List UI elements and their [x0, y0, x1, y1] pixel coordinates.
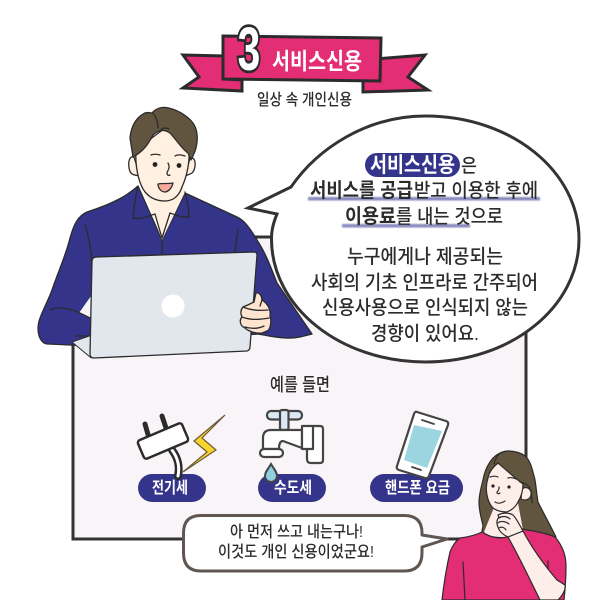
man shirt folds [50, 225, 238, 336]
line 3 regular: 를 내는 것으로 [396, 206, 503, 228]
laptop base [72, 335, 92, 358]
man fingers [242, 300, 269, 328]
man right ear [185, 158, 195, 176]
ribbon right tail [363, 55, 428, 92]
woman hair [479, 451, 556, 540]
example: water [258, 410, 326, 502]
bubble text [308, 153, 540, 345]
man hand [240, 293, 271, 333]
example: electricity [137, 415, 225, 502]
icon: water drop [265, 464, 277, 482]
line 1 tail: 은 [461, 156, 477, 177]
title ribbon [183, 16, 428, 92]
man eyes [153, 162, 181, 168]
woman fingers [498, 516, 510, 530]
reply bubble shape [184, 516, 447, 571]
ribbon title: 서비스신용 [272, 48, 362, 74]
panel: examples background [73, 237, 526, 539]
woman eyes [491, 484, 511, 489]
ribbon left tail [183, 55, 242, 91]
highlight underline 2 [342, 224, 470, 228]
man brows [151, 154, 185, 156]
woman hand [497, 513, 523, 537]
subtitle: 일상 속 개인신용 [257, 91, 352, 109]
man hair strand [153, 113, 169, 132]
icon: phone [397, 412, 448, 478]
icon: plug [137, 416, 189, 476]
main speech bubble [248, 116, 579, 362]
icon: faucet [260, 410, 323, 463]
gap between arm and laptop [79, 296, 91, 319]
line 2 bold: 서비스를 공급 [310, 179, 413, 202]
line 4: 누구에게나 제공되는 [347, 246, 503, 268]
laptop screen [90, 252, 257, 358]
woman hair line [494, 453, 532, 503]
number 3: 3 [238, 16, 260, 84]
line 3 bold: 이용료 [345, 205, 396, 228]
man collar [133, 186, 189, 254]
pill: electricity [138, 474, 206, 502]
line 1 highlighted: 서비스신용 [370, 154, 455, 177]
man nose [167, 163, 170, 175]
man mouth [158, 183, 173, 192]
example: phone [370, 412, 463, 502]
highlight underline 1 [308, 197, 540, 200]
woman shirt [442, 529, 566, 600]
woman nose and mouth [495, 487, 505, 503]
man face [136, 128, 189, 201]
woman character [442, 451, 566, 600]
line 5: 사회의 기초 인프라로 간주되어 [311, 272, 538, 294]
ribbon main band [223, 36, 381, 81]
man left ear [129, 157, 140, 176]
reply speech bubble [184, 516, 447, 571]
label: water: 수도세 [274, 479, 312, 497]
examples heading: 예를 들면 [270, 375, 330, 395]
label: phone: 핸드폰 요금 [385, 479, 450, 497]
woman shirt folds [463, 561, 548, 600]
pill: water [258, 474, 326, 502]
man character [38, 107, 312, 358]
reply line 2: 이것도 개인 신용이었군요! [218, 543, 374, 561]
woman neck [484, 503, 523, 537]
man hair [130, 107, 197, 160]
line 2 regular: 받고 이용한 후에 [414, 180, 538, 202]
laptop logo [162, 294, 184, 318]
woman brows [490, 476, 516, 479]
woman face [486, 463, 523, 512]
man neck [140, 170, 186, 240]
highlight pill [365, 153, 460, 177]
man shirt [38, 186, 312, 346]
label: electricity: 전기세 [152, 479, 188, 497]
icon: lightning [183, 415, 225, 472]
pill: phone [370, 474, 463, 502]
woman ear [521, 488, 531, 500]
line 7: 경향이 있어요. [371, 323, 479, 345]
line 6: 신용사용으로 인식되지 않는 [322, 297, 528, 319]
woman arm [508, 531, 565, 600]
reply line 1: 아 먼저 쓰고 내는구나! [230, 523, 363, 541]
